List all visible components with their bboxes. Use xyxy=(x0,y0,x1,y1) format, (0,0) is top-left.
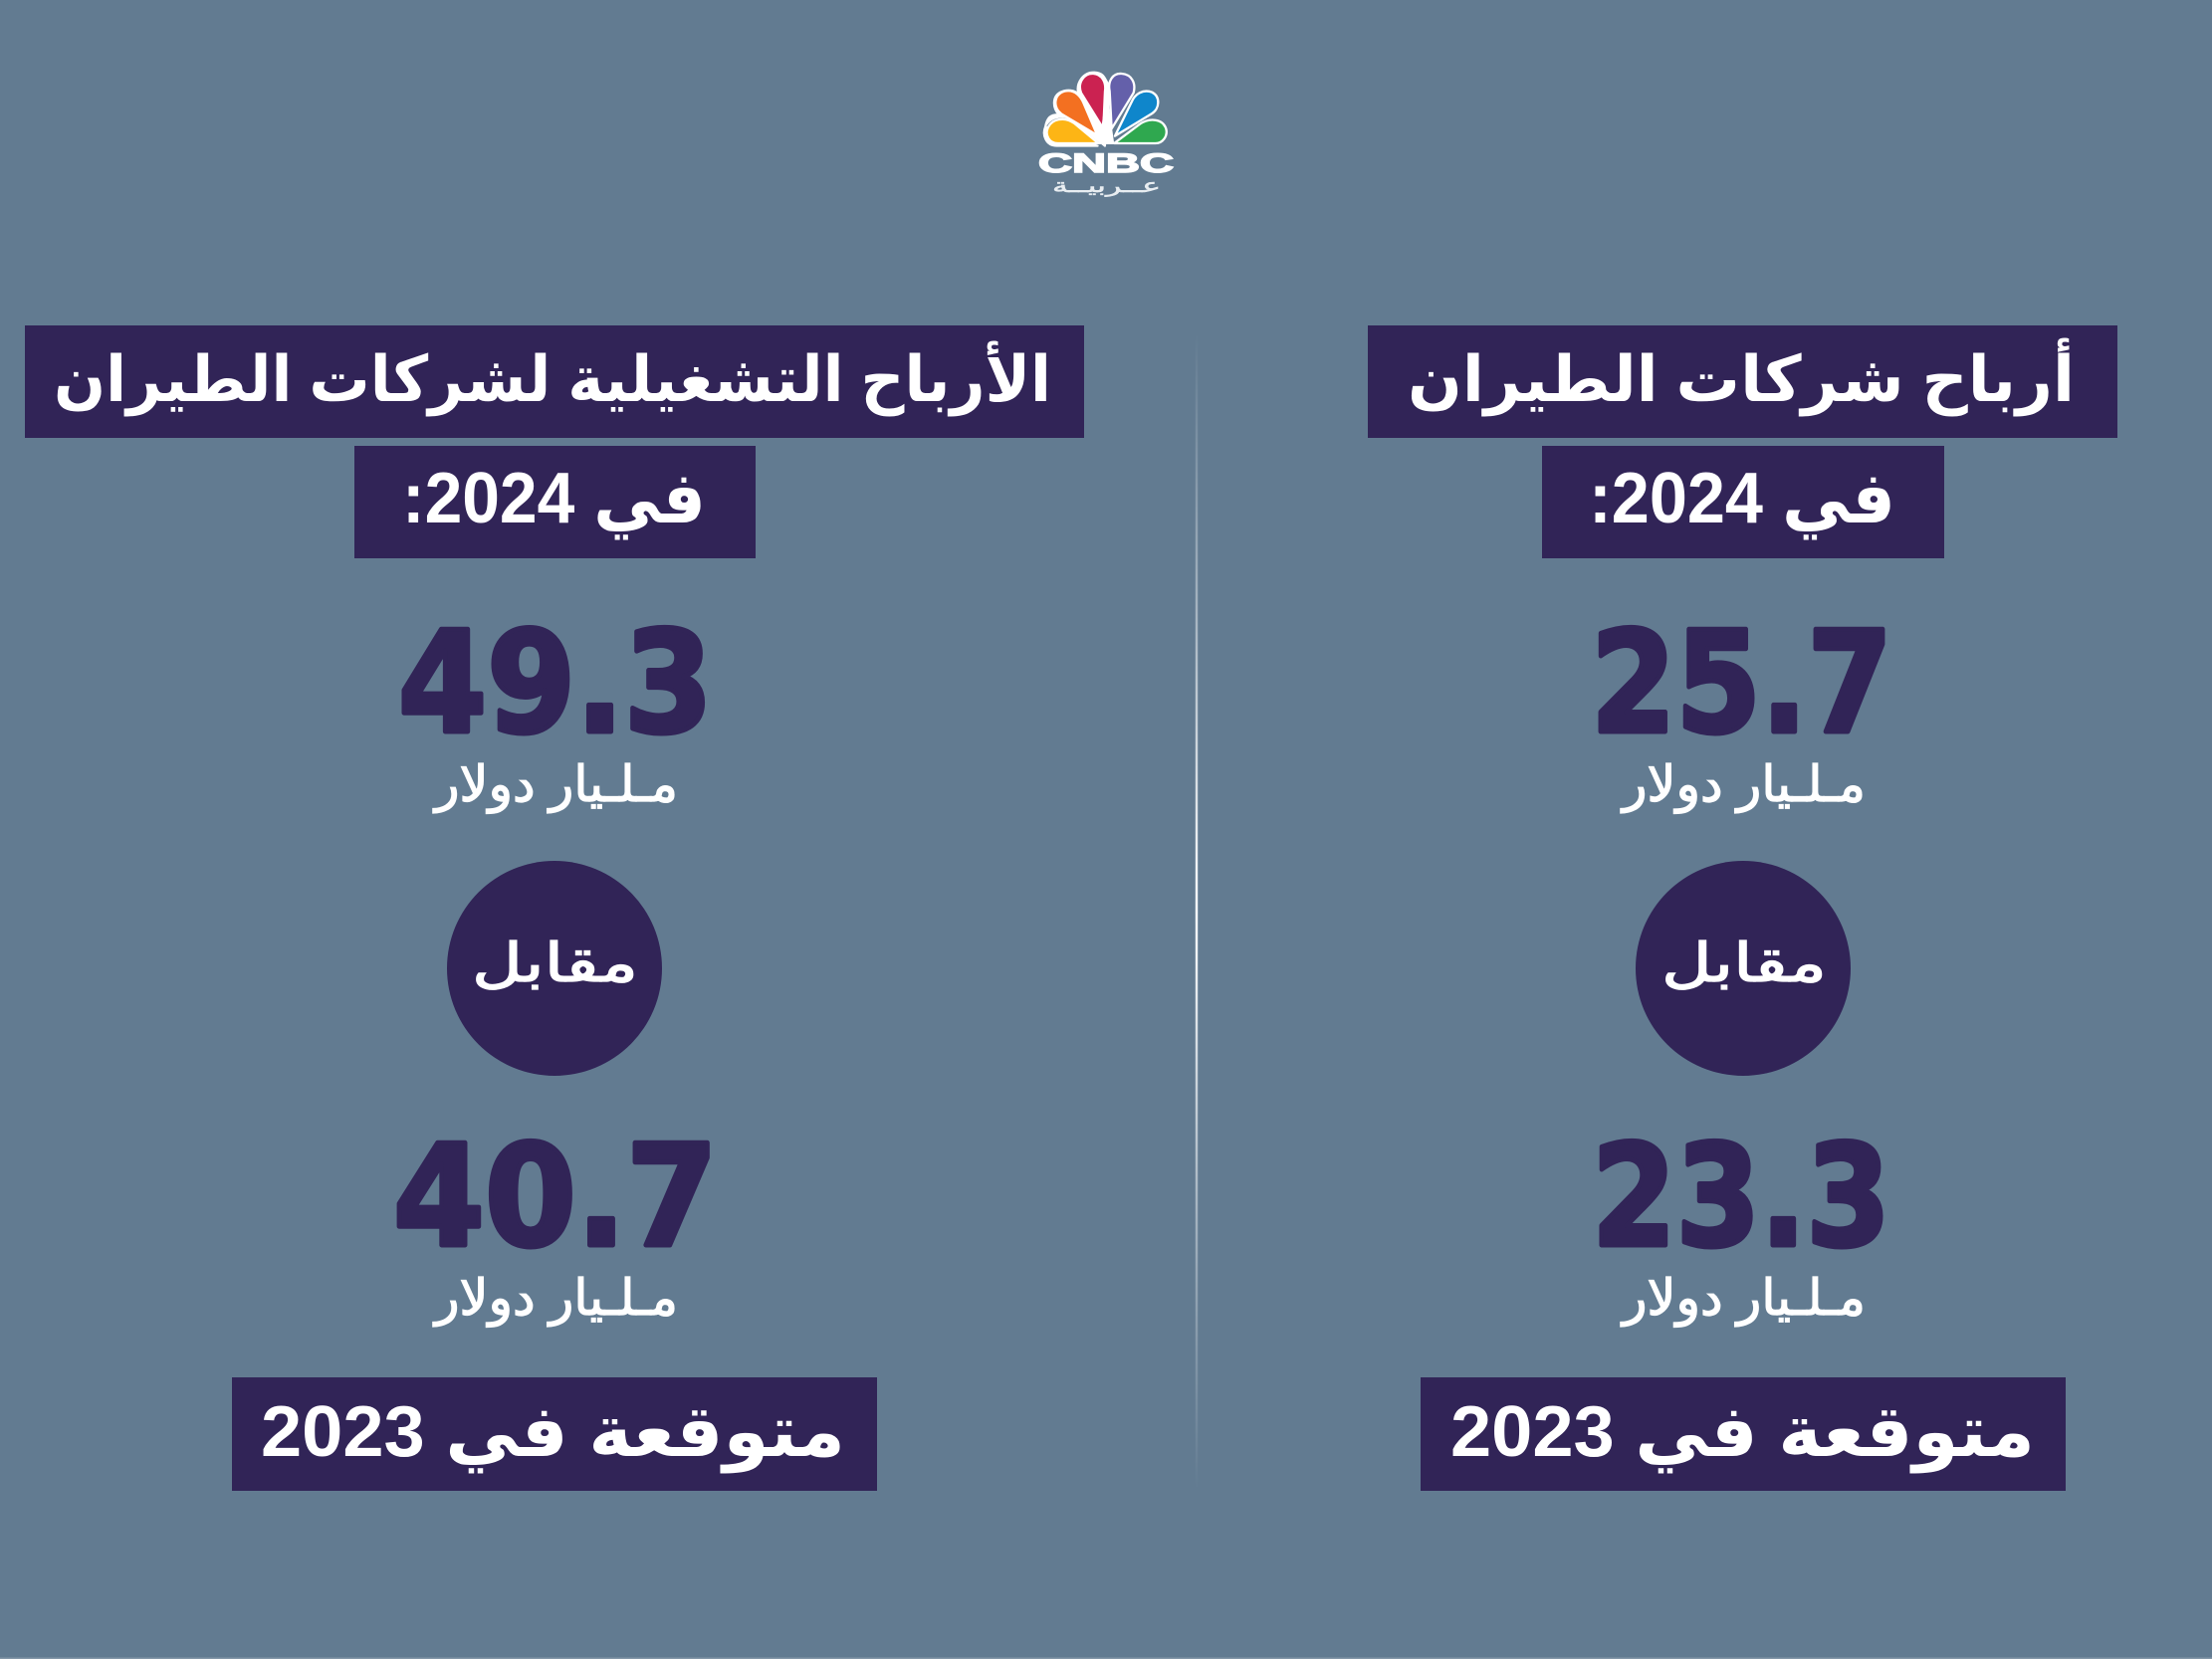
figure: 23.3: 23.3 xyxy=(1592,1116,1890,1279)
circle: versus: مقابل xyxy=(472,933,638,993)
figure: 25.7: 25.7 xyxy=(1591,602,1892,765)
unit: billion dollars: مـلـيار دولار xyxy=(1620,1270,1866,1328)
heading: airline profits line 1 xyxy=(1368,325,2117,438)
unit: billion dollars: مـلـيار دولار xyxy=(432,756,678,814)
heading: airline profits line 1: أرباح شركات الطيران xyxy=(1408,337,2075,417)
center divider xyxy=(1196,333,1198,1490)
unit: billion dollars: مـلـيار دولار xyxy=(432,1270,678,1328)
circle: versus xyxy=(447,861,662,1076)
heading: operating profits line 2: في 2024: xyxy=(402,459,706,540)
panel: operating profits (left) xyxy=(25,325,1084,1491)
heading: operating profits line 1 xyxy=(25,325,1084,438)
heading: operating profits line 2 xyxy=(354,446,756,558)
figure: 40.7: 40.7 xyxy=(393,1116,718,1279)
label: expected in 2023 xyxy=(232,1377,877,1491)
heading: airline profits line 2 xyxy=(1542,446,1944,558)
label: expected in 2023 xyxy=(1421,1377,2066,1491)
label: expected in 2023: متوقعة في 2023 xyxy=(1450,1392,2035,1474)
circle: versus xyxy=(1636,861,1851,1076)
logo: CNBC Arabia: عــربيــة xyxy=(1052,175,1161,197)
logo: CNBC Arabia: CNBC xyxy=(1038,148,1174,178)
circle: versus: مقابل xyxy=(1661,933,1827,993)
logo: CNBC Arabia xyxy=(1038,73,1174,197)
heading: airline profits line 2: في 2024: xyxy=(1589,459,1895,540)
figure: 49.3: 49.3 xyxy=(398,602,713,765)
panel: airline profits (right) xyxy=(1368,325,2117,1491)
heading: operating profits line 1: الأرباح التشغيلية لشركات الطيران xyxy=(54,340,1051,417)
unit: billion dollars: مـلـيار دولار xyxy=(1620,756,1866,814)
label: expected in 2023: متوقعة في 2023 xyxy=(261,1392,845,1474)
